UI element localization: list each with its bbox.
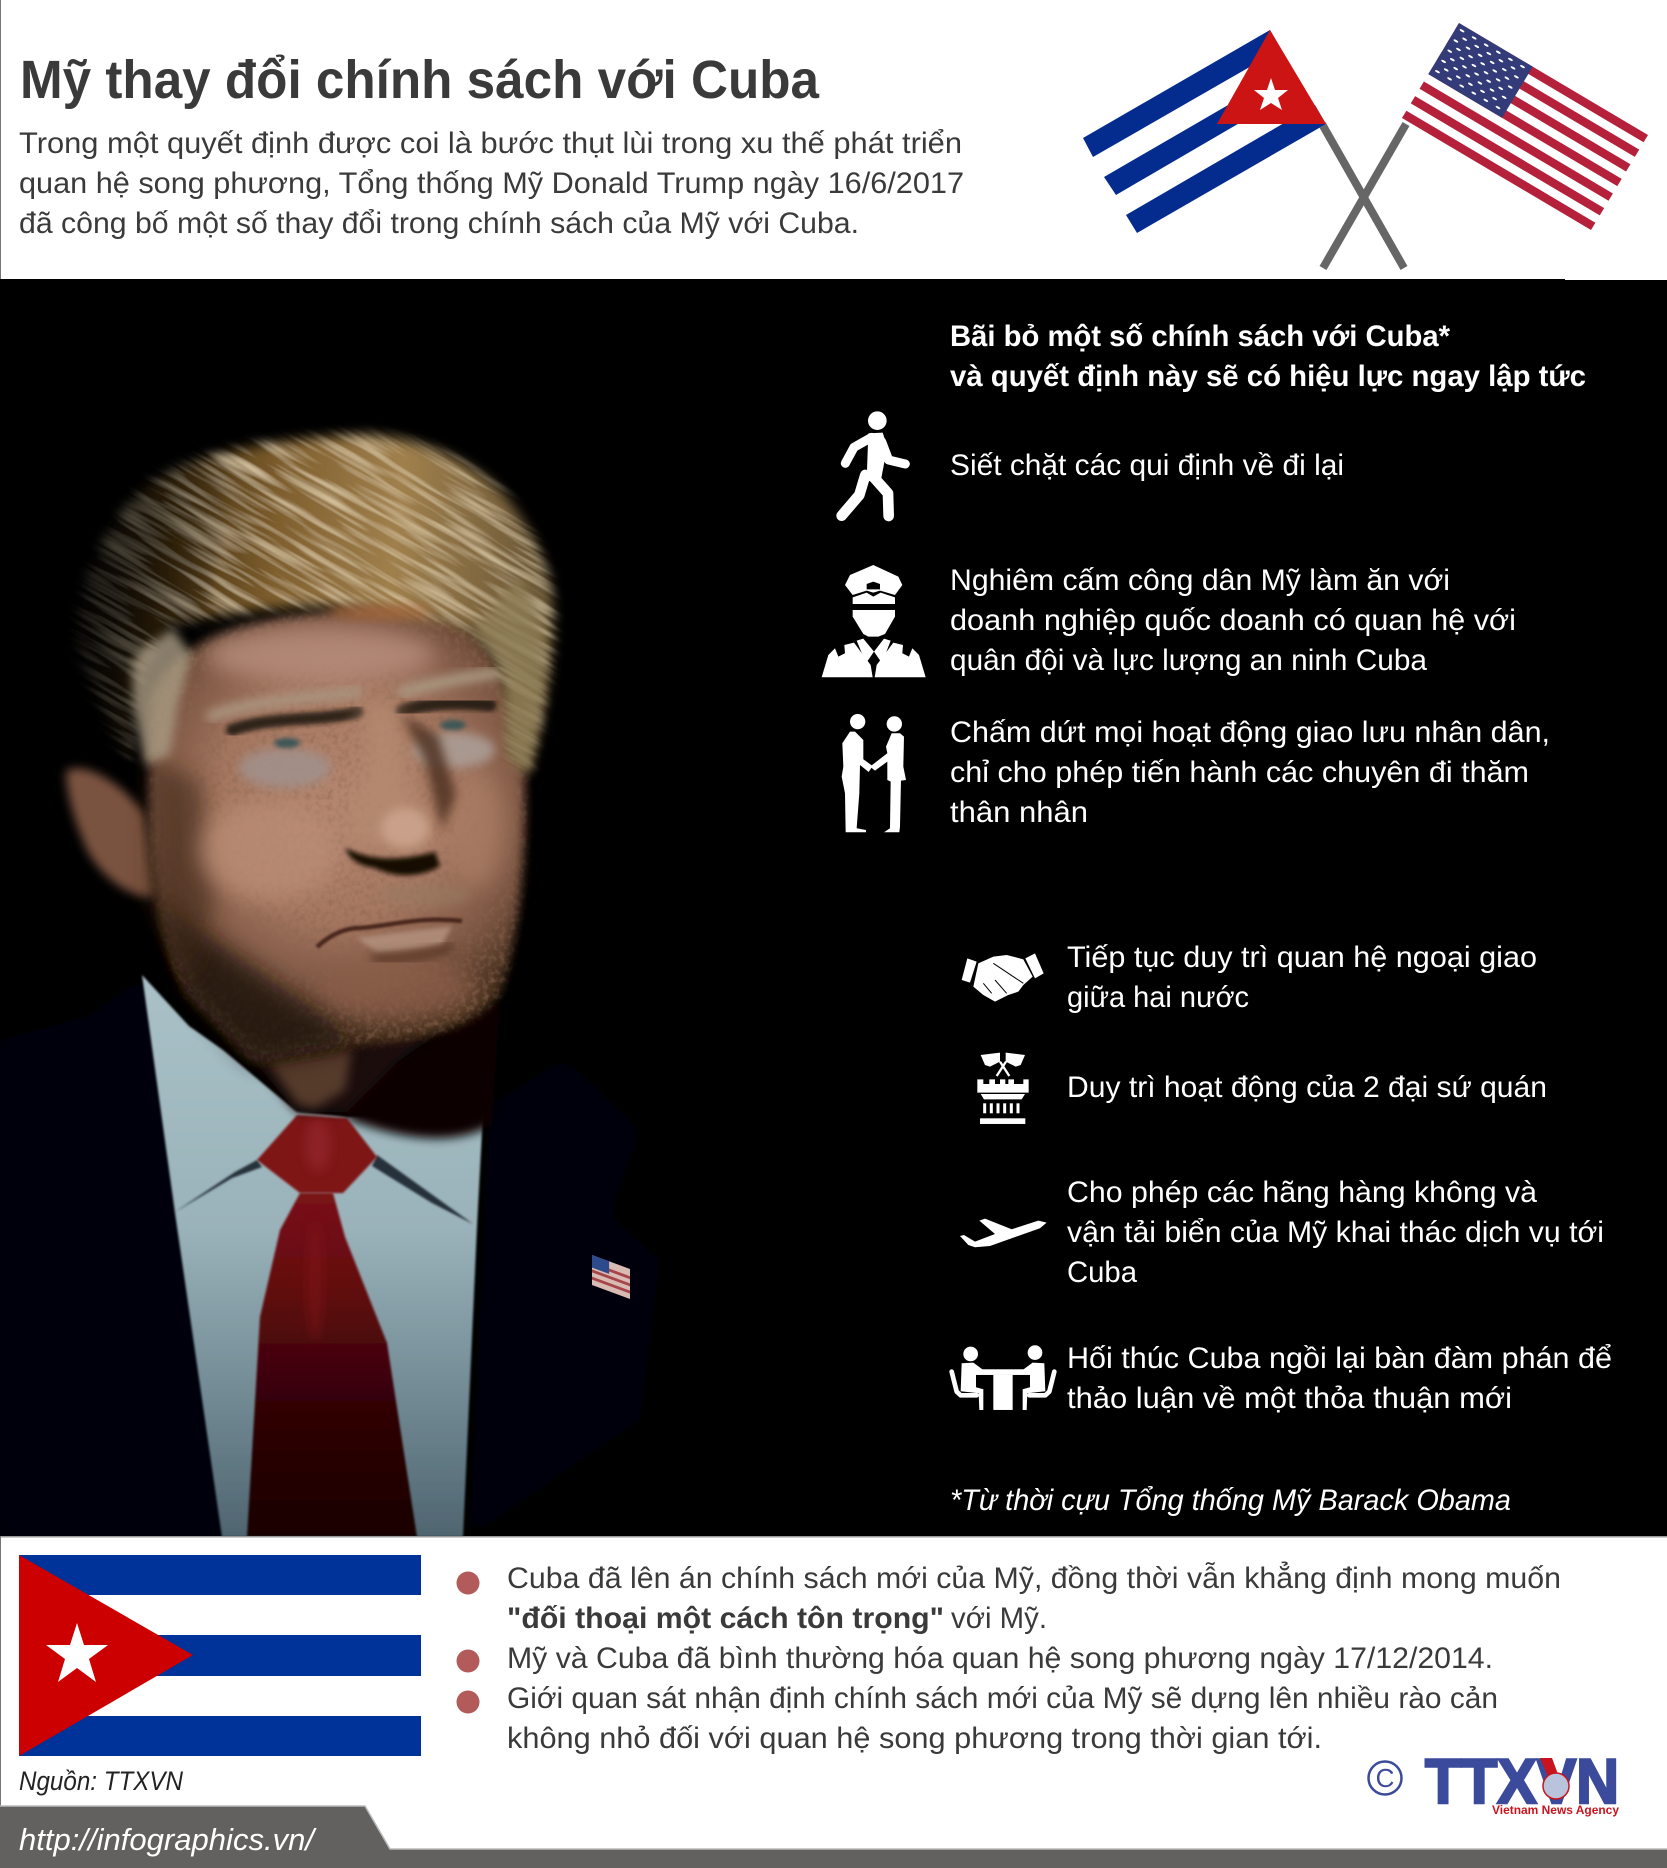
icon: walking person (842, 411, 905, 516)
bullet list: Giới quan sát nhận định chính sách mới của Mỹ sẽ dựng lên nhiều rào cản (507, 1682, 1498, 1715)
text: airlines and shipping (1067, 1176, 1604, 1289)
text: new negotiations: Hối thúc Cuba ngồi lại bàn đàm phán để (1067, 1342, 1612, 1375)
text: travel: Siết chặt các qui định về đi lại (950, 449, 1344, 482)
text: embassies: Duy trì hoạt động của 2 đại sứ quán (1067, 1071, 1547, 1104)
bullet markers (456, 1572, 480, 1714)
text: new negotiations: thảo luận về một thỏa thuận mới (1067, 1382, 1512, 1415)
nose (345, 700, 456, 875)
face (150, 611, 525, 1060)
source: Nguồn: TTXVN (19, 1766, 183, 1796)
text: new negotiations (1067, 1342, 1612, 1415)
icon: crossed Cuba and USA flags (1083, 23, 1648, 268)
neck (165, 953, 500, 1112)
text: airlines and shipping: vận tải biển của Mỹ khai thác dịch vụ tới (1067, 1216, 1604, 1249)
bullet list: với Mỹ. (951, 1602, 1047, 1635)
title: Mỹ thay đổi chính sách với Cuba (20, 50, 820, 110)
icon: police officer (822, 565, 926, 677)
text: airlines and shipping: Cuba (1067, 1256, 1137, 1289)
text: business ban (950, 564, 1516, 677)
lapel pin (592, 1255, 630, 1299)
logo: TTXVN: Vietnam News Agency (1492, 1803, 1619, 1817)
ear (66, 768, 156, 897)
shirt and collar (142, 975, 500, 1537)
suit (0, 975, 660, 1537)
mouth (317, 920, 462, 958)
logo: TTXVN: C (1376, 1763, 1394, 1793)
hair (0, 228, 700, 982)
intro text block: quan hệ song phương, Tổng thống Mỹ Donald Trump ngày 16/6/2017 (19, 167, 964, 200)
bullet list: "đối thoại một cách tôn trọng" (507, 1602, 944, 1635)
text: diplomatic relations: Tiếp tục duy trì quan hệ ngoại giao (1067, 941, 1537, 974)
text: business ban: Nghiêm cấm công dân Mỹ làm ăn với (950, 564, 1450, 597)
text: people-to-people exchanges: chỉ cho phép tiến hành các chuyên đi thăm (950, 756, 1529, 789)
icon: man and woman shaking hands (842, 714, 906, 832)
heading: và quyết định này sẽ có hiệu lực ngay lập tức (950, 360, 1586, 393)
heading (950, 320, 1586, 393)
text: diplomatic relations: giữa hai nước (1067, 981, 1249, 1014)
footer band (0, 1806, 1667, 1868)
footnote: *Từ thời cựu Tổng thống Mỹ Barack Obama (950, 1484, 1511, 1517)
panel: bottom white panel (0, 1536, 1667, 1868)
red tie (247, 1115, 417, 1537)
icon: embassy (977, 1053, 1029, 1124)
brows and eyes (212, 673, 500, 730)
text: airlines and shipping: Cho phép các hãng hàng không và (1067, 1176, 1537, 1209)
text: people-to-people exchanges (950, 716, 1550, 829)
text: business ban: quân đội và lực lượng an ninh Cuba (950, 644, 1427, 677)
eye bags (239, 732, 495, 788)
text: people-to-people exchanges: Chấm dứt mọi hoạt động giao lưu nhân dân, (950, 716, 1550, 749)
flag poles (1322, 124, 1406, 268)
website url: http://infographics.vn/ (19, 1822, 317, 1857)
photo: portrait of Donald Trump (0, 228, 700, 1537)
text: diplomatic relations (1067, 941, 1537, 1014)
American flag (1402, 23, 1648, 230)
text: people-to-people exchanges: thân nhân (950, 796, 1088, 829)
Cuban flag (1083, 30, 1326, 235)
bullet list: Mỹ và Cuba đã bình thường hóa quan hệ song phương ngày 17/12/2014. (507, 1642, 1493, 1675)
icon: handshake (962, 953, 1044, 1002)
icon: negotiation table (952, 1345, 1054, 1410)
irises (274, 720, 466, 748)
bullet list: Cuba đã lên án chính sách mới của Mỹ, đồng thời vẫn khẳng định mong muốn (507, 1561, 1561, 1595)
bullet list (456, 1561, 1561, 1755)
intro text block: đã công bố một số thay đổi trong chính sách của Mỹ với Cuba. (19, 207, 859, 240)
text: business ban: doanh nghiệp quốc doanh có quan hệ với (950, 604, 1516, 637)
heading: Bãi bỏ một số chính sách với Cuba* (950, 320, 1450, 353)
icon: airplane (960, 1219, 1047, 1247)
panel: retained policies (952, 941, 1612, 1415)
intro text block (19, 127, 964, 240)
logo: TTXVN: TTXVN (1425, 1747, 1619, 1817)
facial modelling (150, 627, 505, 1064)
bullet list: không nhỏ đối với quan hệ song phương trong thời gian tới. (507, 1722, 1322, 1755)
panel: black main panel (0, 228, 1667, 1537)
icon: Cuban flag (19, 1555, 421, 1756)
panel: repealed policies (822, 320, 1586, 832)
intro text block: Trong một quyết định được coi là bước thụt lùi trong xu thế phát triển (19, 127, 962, 160)
